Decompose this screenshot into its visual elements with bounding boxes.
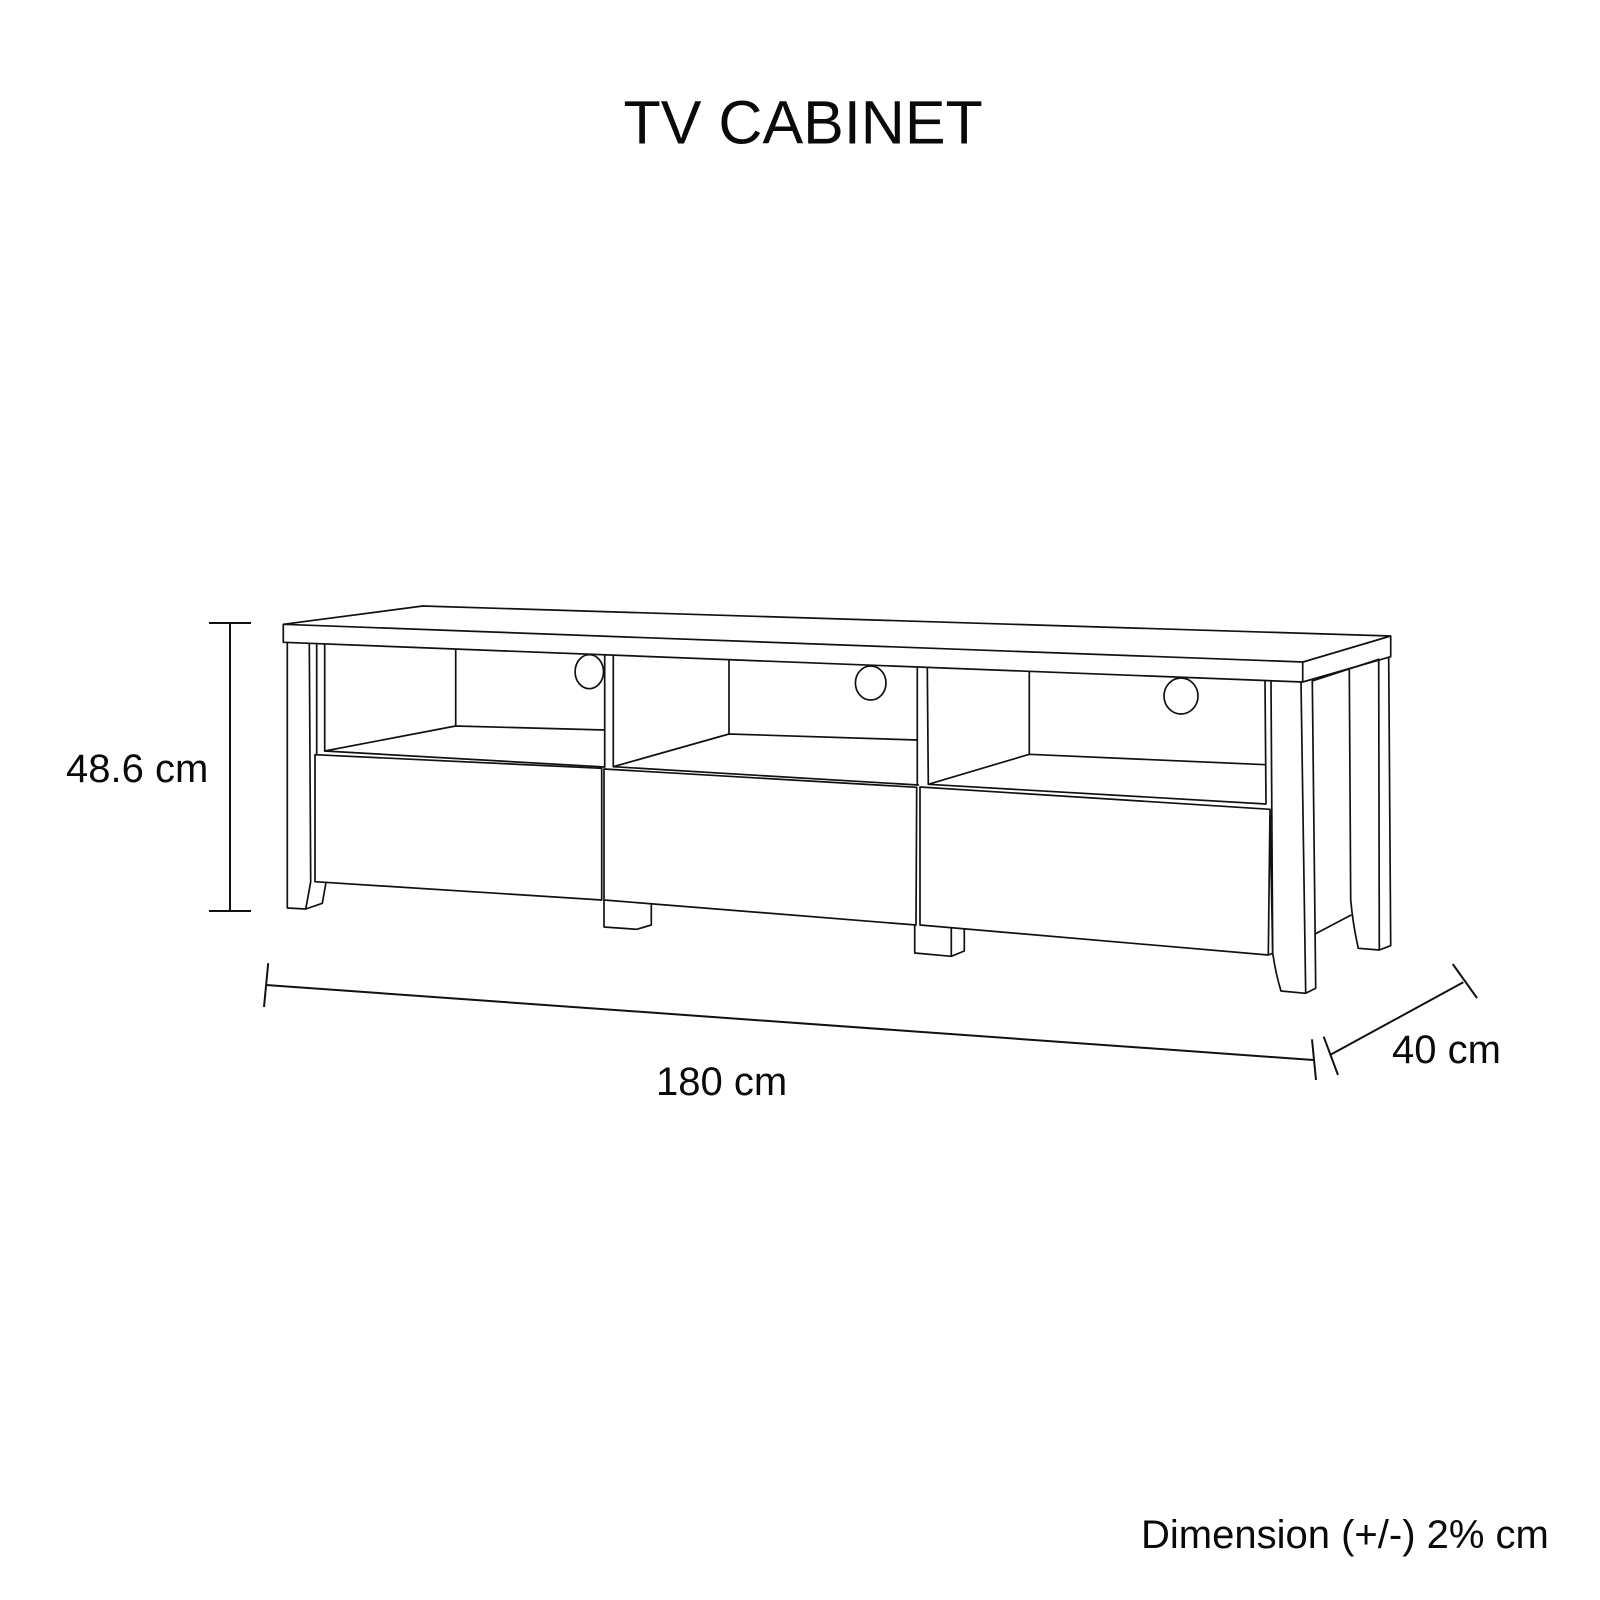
right-centre foot bbox=[915, 925, 964, 956]
cable hole 2 bbox=[855, 666, 886, 700]
divider 2 bbox=[917, 667, 928, 785]
height dimension line bbox=[209, 623, 251, 911]
right side panel and rear leg bbox=[1312, 657, 1391, 950]
tolerance note: Dimension (+/-) 2% cm bbox=[1141, 1513, 1549, 1557]
title: TV CABINET bbox=[624, 88, 983, 156]
centre foot bbox=[604, 900, 651, 929]
centre compartment shelf bbox=[613, 660, 918, 785]
right front leg bbox=[1271, 681, 1316, 993]
depth dimension line bbox=[1324, 964, 1477, 1075]
left inner upright bbox=[317, 644, 325, 754]
cable hole 3 bbox=[1164, 678, 1198, 714]
divider 1 bbox=[605, 656, 613, 767]
width dimension line bbox=[264, 963, 1316, 1080]
right drawer bbox=[920, 787, 1273, 955]
tabletop bbox=[283, 606, 1391, 682]
height label: 48.6 cm bbox=[66, 747, 208, 791]
centre drawer bbox=[604, 769, 917, 925]
cable hole 1 bbox=[575, 655, 604, 689]
left front leg bbox=[287, 642, 326, 909]
left compartment shelf bbox=[325, 649, 605, 767]
depth label: 40 cm bbox=[1392, 1028, 1501, 1072]
right compartment shelf bbox=[928, 672, 1266, 804]
TV cabinet line drawing bbox=[283, 606, 1391, 993]
width label: 180 cm bbox=[656, 1060, 787, 1104]
left drawer bbox=[315, 755, 602, 900]
